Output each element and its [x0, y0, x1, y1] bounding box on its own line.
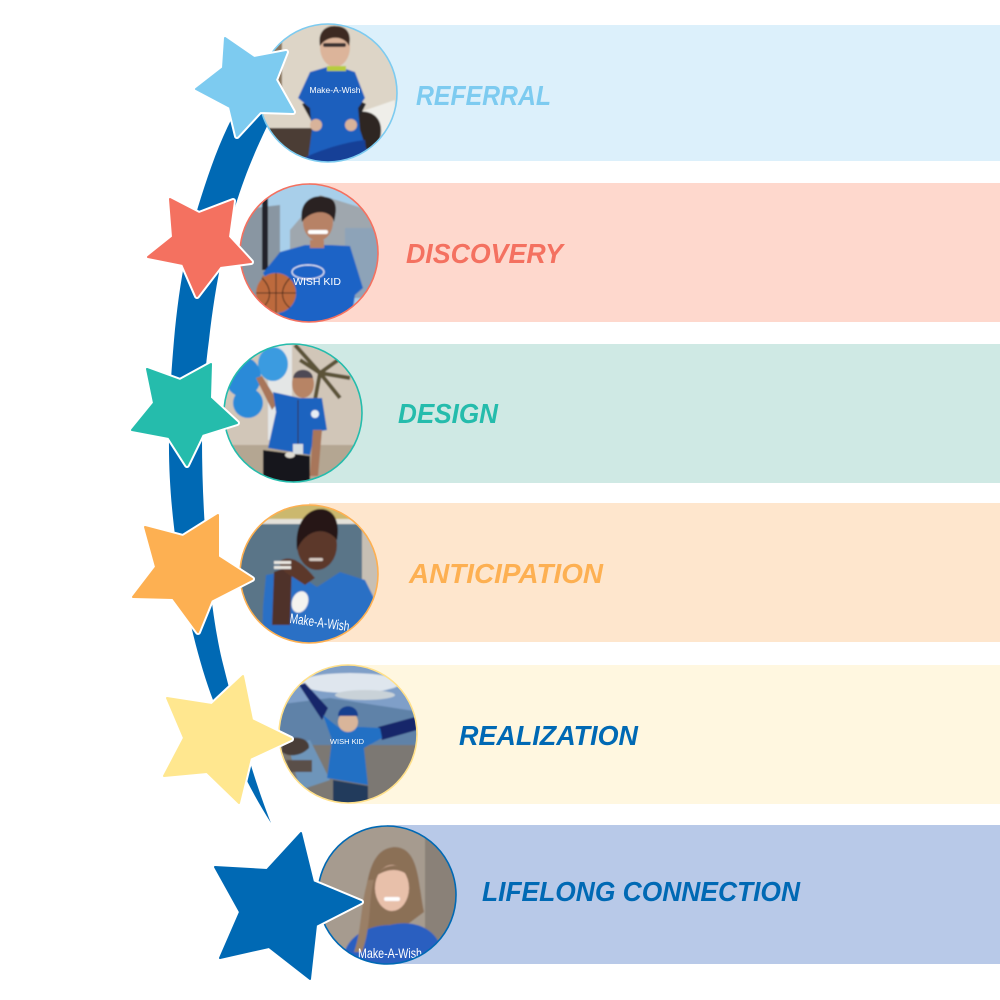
curved timeline arc [169, 103, 275, 823]
photo: girl with long hair [320, 826, 456, 964]
band: lifelong connection [387, 825, 1000, 964]
star: discovery [148, 199, 251, 296]
panel: referral [196, 20, 1000, 170]
shirt text: Make-A-Wish [309, 85, 361, 95]
panel: realization [164, 660, 1000, 810]
panel: design [132, 340, 1000, 486]
band: anticipation [309, 503, 1000, 642]
star: referral [196, 38, 293, 136]
photo: boy with basketball [241, 184, 378, 322]
photo: volunteer with balloons [225, 344, 362, 482]
photo: smiling girl [241, 506, 378, 642]
photo ring [240, 505, 378, 643]
heading: lifelong connection: LIFELONG CONNECTION [482, 876, 801, 907]
heading: realization: REALIZATION [459, 720, 639, 751]
star: lifelong connection [215, 833, 361, 979]
star: design [132, 364, 237, 465]
shirt text: Make-A-Wish [289, 610, 351, 634]
shirt text: Make-A-Wish [358, 945, 422, 961]
star: realization [164, 676, 291, 803]
heading: discovery: DISCOVERY [406, 238, 565, 269]
heading: referral: REFERRAL [416, 80, 551, 111]
band: discovery [309, 183, 1000, 322]
heading: design: DESIGN [398, 398, 499, 429]
band: design [293, 344, 1000, 483]
photo ring [318, 826, 456, 964]
star: anticipation [133, 515, 252, 632]
photo ring [259, 24, 397, 162]
photo: boy on mountain [280, 666, 416, 802]
panel: lifelong connection [215, 820, 1000, 979]
photo ring [279, 665, 417, 803]
heading: anticipation: ANTICIPATION [408, 558, 604, 589]
band: realization [348, 665, 1000, 804]
panel: anticipation [133, 500, 1000, 650]
band: referral [328, 25, 1000, 161]
photo ring [240, 184, 378, 322]
shirt text: WISH KID [330, 737, 365, 746]
shirt text: WISH KID [293, 276, 341, 288]
photo: boy in wish shirt [263, 24, 396, 162]
photo ring [224, 344, 362, 482]
panel: discovery [148, 180, 1000, 330]
